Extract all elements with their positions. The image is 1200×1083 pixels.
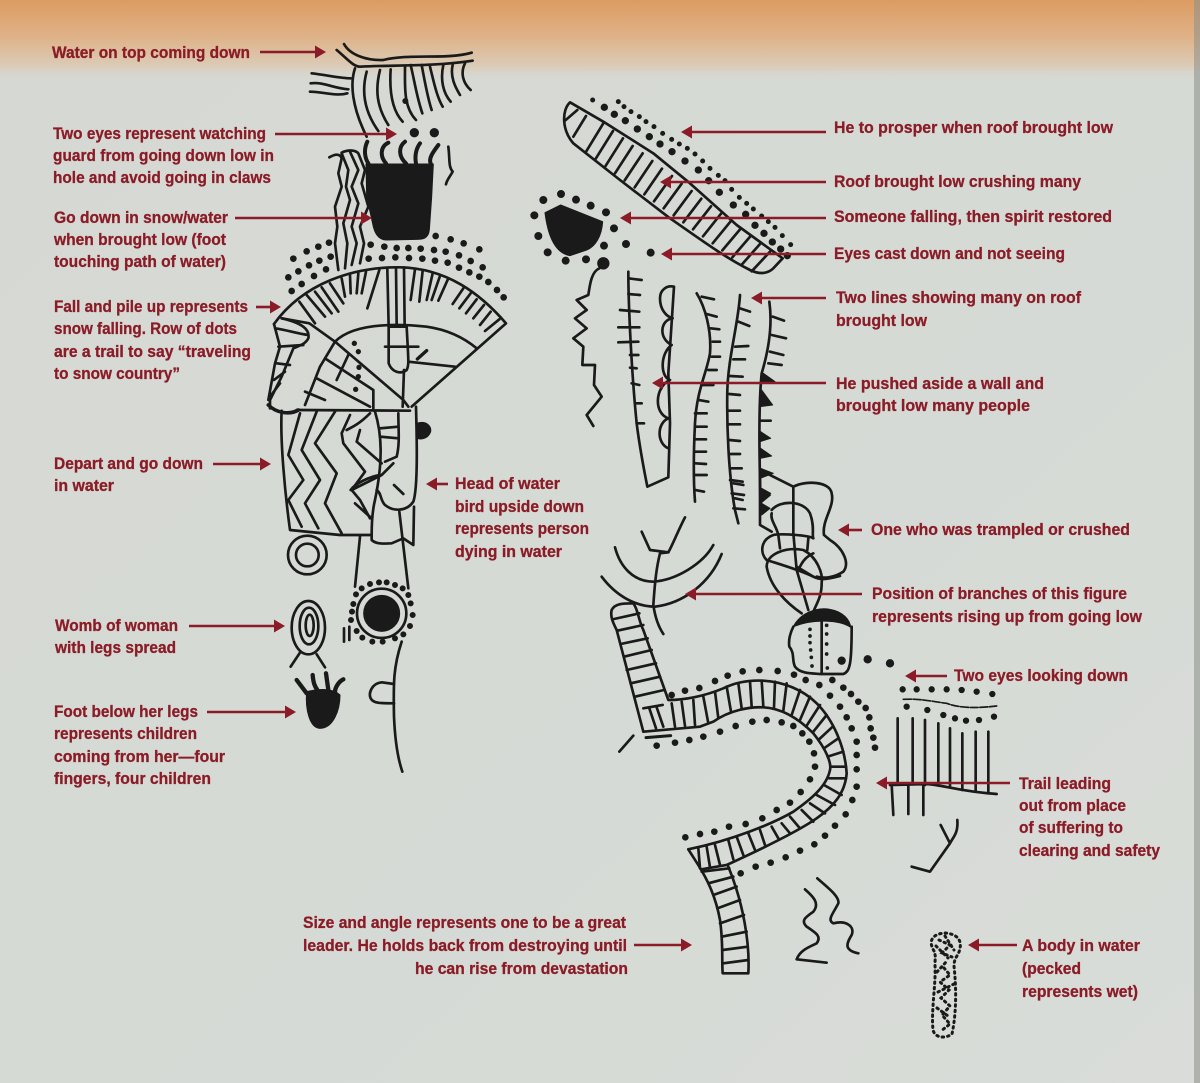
callout: two lines: Two lines showing many on roof <box>836 288 1081 307</box>
icon: pecked body in water <box>931 933 960 1037</box>
callout: go down in snow: touching path of water) <box>54 252 226 271</box>
callout: he pushed aside: He pushed aside a wall and <box>836 374 1044 393</box>
callout: someone falling: Someone falling, then spirit restored <box>834 207 1112 226</box>
callout: fall and pile up: to snow country” <box>54 364 180 383</box>
icon: scalloped wall <box>618 272 674 487</box>
callout: two eyes: guard from going down low in <box>53 146 274 165</box>
callout: depart and go down: in water <box>54 476 114 495</box>
callout: he pushed aside <box>836 374 1044 415</box>
icon: black hole with claws <box>365 142 453 240</box>
callout: trail leading: clearing and safety <box>1019 841 1160 860</box>
callout: go down in snow <box>53 208 228 271</box>
icon: line with ticks two <box>727 295 750 523</box>
callout: foot below her legs: Foot below her legs <box>54 702 198 721</box>
icon: lower body line <box>370 642 402 772</box>
arrow: roof brought low <box>660 176 826 188</box>
callout: fall and pile up: snow falling. Row of dots <box>54 319 237 338</box>
callout: trail leading <box>1019 774 1160 860</box>
callout: trail leading: Trail leading <box>1019 774 1111 793</box>
callout: a body in water: represents wet) <box>1022 982 1138 1001</box>
arrow: foot <box>207 706 296 718</box>
icon: ladder trail <box>611 603 847 973</box>
callout: trail leading: out from place <box>1019 796 1126 815</box>
icon: two eyes <box>414 119 434 147</box>
icon: dotted circle with black centre <box>344 582 413 642</box>
callout: head of water bird <box>455 474 589 561</box>
icon: branches figure <box>602 517 722 634</box>
icon: path of water <box>329 150 368 270</box>
arrow: position of branches <box>685 588 862 600</box>
icon: Y figure <box>912 820 957 872</box>
callout: a body in water: A body in water <box>1022 936 1140 955</box>
arrow: head of water bird <box>426 478 448 490</box>
arrow: he pushed aside <box>652 376 826 390</box>
figure: right column rock art (top) <box>534 100 791 523</box>
icon: womb with legs <box>291 601 325 667</box>
callout: position of branches: Position of branches of this figure <box>872 584 1127 603</box>
callout: head of water bird: dying in water <box>455 542 562 561</box>
icon: row of dots trail <box>288 236 504 297</box>
callout: fall and pile up <box>54 297 251 383</box>
callout: two eyes looking down: Two eyes looking down <box>954 666 1128 685</box>
arrow: he to prosper <box>681 126 826 138</box>
callout: two eyes: hole and avoid going in claws <box>53 168 271 187</box>
arrow: water on top <box>260 46 326 58</box>
icon: line ends <box>730 470 772 532</box>
callout: two eyes <box>53 124 274 187</box>
arrow: a body in water <box>968 938 1017 952</box>
callout: fall and pile up: Fall and pile up represents <box>54 297 248 316</box>
callout: foot below her legs: fingers, four children <box>54 769 211 788</box>
callout: he to prosper: He to prosper when roof brought low <box>834 118 1114 137</box>
icon: striped roof <box>564 102 783 273</box>
callout: position of branches: represents rising up from going low <box>872 607 1143 626</box>
icon: dots above the roof <box>593 100 791 256</box>
icon: line with black triangles <box>759 302 786 510</box>
icon: line with ticks one <box>694 293 720 502</box>
icon: dots along the trail <box>657 670 875 873</box>
figure: right column rock art (bottom) <box>602 470 997 973</box>
callout: trail leading: of suffering to <box>1019 818 1123 837</box>
icon: black foot <box>297 673 343 728</box>
callout: depart and go down <box>54 454 203 495</box>
icon: water on top <box>310 44 473 137</box>
arrow: go down in snow <box>235 212 372 224</box>
callout: two lines: brought low <box>836 311 928 330</box>
callout: depart and go down: Depart and go down <box>54 454 203 473</box>
icon: fallen black figure with dots <box>534 194 651 261</box>
arrow: two eyes <box>275 128 397 140</box>
callout: head of water bird: Head of water <box>455 474 560 493</box>
callout: size and angle <box>303 913 628 978</box>
figure: left column rock art (top) <box>268 44 506 408</box>
callout: two lines <box>836 288 1081 330</box>
callout: size and angle: he can rise from devastation <box>415 959 628 978</box>
callout: foot below her legs: represents children <box>54 724 197 743</box>
icon: concentric ring <box>288 536 327 574</box>
callout: fall and pile up: are a trail to say “traveling <box>54 342 251 361</box>
callout: foot below her legs <box>54 702 225 788</box>
icon: squiggle line with head <box>573 258 609 426</box>
arrow: trail leading <box>876 776 1010 790</box>
icon: trampled figure <box>760 470 846 613</box>
icon: head with two eyes looking down <box>789 609 890 674</box>
icon: fan of snow falling <box>268 267 506 408</box>
callout: size and angle: Size and angle represents one to be a great <box>303 913 626 932</box>
figure: left column rock art (bottom) <box>268 405 431 772</box>
callout: head of water bird: represents person <box>455 519 589 538</box>
callout: a body in water: (pecked <box>1022 959 1081 978</box>
callout: two eyes: Two eyes represent watching <box>53 124 266 143</box>
callout: position of branches <box>872 584 1143 626</box>
arrow: two eyes looking down <box>905 670 947 682</box>
callout: one who was trampled: One who was trampled or crushed <box>871 520 1130 539</box>
icon: water bird body with wavy water <box>268 405 431 588</box>
callout: go down in snow: Go down in snow/water <box>54 208 228 227</box>
callout: he pushed aside: brought low many people <box>836 396 1030 415</box>
arrow: size and angle <box>634 938 692 952</box>
callout: water on top: Water on top coming down <box>52 43 250 62</box>
callout: a body in water <box>1022 936 1140 1001</box>
callout: womb of woman: Womb of woman <box>55 616 178 635</box>
arrow: womb <box>189 620 285 632</box>
callout: womb of woman: with legs spread <box>54 638 176 657</box>
callout: eyes cast down: Eyes cast down and not seeing <box>834 244 1065 263</box>
callout: head of water bird: bird upside down <box>455 497 584 516</box>
callout: go down in snow: when brought low (foot <box>53 230 226 249</box>
arrow: two lines <box>751 292 826 304</box>
arrow: one who was trampled <box>838 524 862 536</box>
arrow: eyes cast down <box>661 248 826 260</box>
callout: foot below her legs: coming from her—four <box>54 747 225 766</box>
callout: roof brought low: Roof brought low crushing many <box>834 172 1082 191</box>
icon: squiggles <box>797 878 858 963</box>
icon: comb with dots <box>890 689 997 815</box>
arrow: fall and pile up <box>256 300 281 314</box>
callout: size and angle: leader. He holds back from destroying until <box>303 936 627 955</box>
callout: womb of woman <box>54 616 178 657</box>
arrow: someone falling <box>620 212 826 224</box>
arrow: depart <box>213 458 271 470</box>
